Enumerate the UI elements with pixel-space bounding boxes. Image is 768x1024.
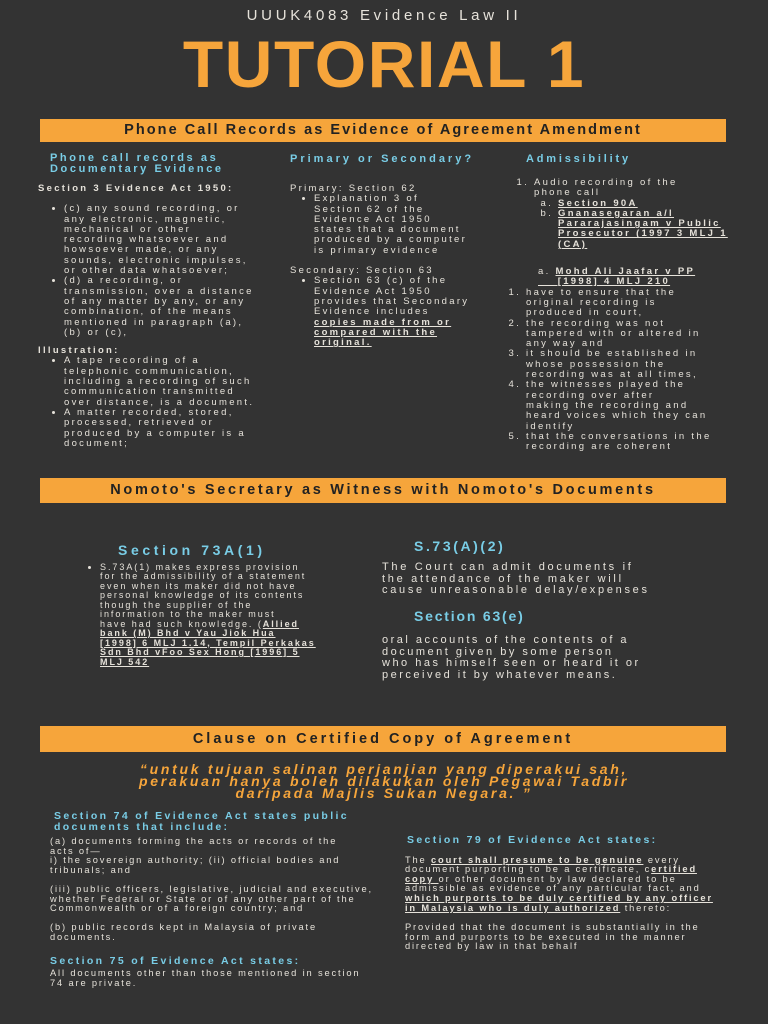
- panel: section 63(e): perceived it by whatever means.: [382, 669, 617, 681]
- panel: section 73A(1): though the supplier of the: [100, 600, 252, 610]
- panel: documentary evidence: telephonic communication,: [64, 366, 234, 377]
- panel: S.73(A)(2): cause unreasonable delay/expenses: [382, 584, 650, 596]
- panel: documentary evidence: Illustration:: [38, 345, 120, 356]
- quote: daripada Majlis Sukan Negara. ”: [236, 785, 532, 801]
- panel: admissibility: recording over after: [526, 390, 654, 401]
- panel: section 79: document purporting to be a certificate, certified: [405, 864, 697, 874]
- panel: admissibility: have to ensure that the: [526, 287, 676, 298]
- panel: admissibility: Pararajasingam v Public: [558, 218, 721, 229]
- banner: certified copy: [40, 726, 726, 752]
- banner: certified copy: Clause on Certified Copy of Agreement: [193, 731, 573, 747]
- panel: documentary evidence: mentioned in paragraph (a),: [64, 317, 243, 328]
- panel: documentary evidence: document;: [64, 438, 129, 449]
- title: TUTORIAL 1: [183, 27, 585, 101]
- panel: primary or secondary: is primary evidence: [314, 245, 440, 256]
- panel: S.73(A)(2): the attendance of the maker will: [382, 573, 624, 585]
- panel: documentary evidence: mechanical or other: [64, 224, 191, 235]
- panel: section 73A(1): [1998] 6 MLJ 1.14, Tempil Perkakas: [100, 638, 316, 648]
- panel: section 79: The court shall presume to be genuine every: [405, 855, 680, 865]
- panel: section 63(e): oral accounts of the contents of a: [382, 634, 629, 646]
- panel: admissibility: a. Mohd Ali Jaafar v PP: [538, 266, 695, 277]
- panel: primary or secondary: original.: [314, 337, 372, 348]
- panel: primary or secondary: Primary or Secondary?: [290, 153, 474, 165]
- panel: section 79: Section 79 of Evidence Act states:: [407, 834, 657, 846]
- panel: documentary evidence: (b) or (c),: [64, 327, 128, 338]
- panel: admissibility: recording was at all times,: [526, 369, 698, 380]
- panel: section 79: which purports to be duly certified by any officer: [405, 893, 713, 903]
- panel: documentary evidence: Documentary Evidence: [50, 163, 224, 175]
- panel: documentary evidence: Section 3 Evidence Act 1950:: [38, 183, 234, 194]
- panel: documentary evidence: A matter recorded, stored,: [64, 407, 234, 418]
- panel: admissibility: the recording was not: [526, 318, 665, 329]
- panel: admissibility: Prosecutor (1997 3 MLJ 1: [558, 228, 728, 239]
- panel: section 73A(1): MLJ 542: [100, 657, 149, 667]
- panel: documentary evidence: recording whatsoever and: [64, 234, 229, 245]
- panel: documentary evidence: combination, of the means: [64, 306, 233, 317]
- panel: documentary evidence: or other data whatsoever;: [64, 265, 229, 276]
- panel: section 63(e): who has himself seen or heard it or: [382, 657, 641, 669]
- panel: admissibility: Section 90A: [558, 198, 638, 209]
- panel: admissibility: original recording is: [526, 297, 657, 308]
- panel: section 73A(1): have had such knowledge. (Allied: [100, 619, 299, 629]
- panel: section 74 and 75: acts of—: [50, 846, 101, 856]
- panel: documentary evidence: (c) any sound recording, or: [64, 203, 240, 214]
- panel: section 79: in Malaysia who is duly authorized thereto:: [405, 903, 671, 913]
- panel: section 73A(1): Section 73A(1): [118, 542, 266, 558]
- panel: S.73(A)(2): The Court can admit documents if: [382, 561, 633, 573]
- quote: “untuk tujuan salinan perjanjian yang diperakui sah,: [140, 761, 628, 777]
- panel: section 74 and 75: (a) documents forming the acts or records of the: [50, 836, 337, 846]
- panel: primary or secondary: states that a document: [314, 224, 461, 235]
- panel: admissibility: making the recording and: [526, 400, 688, 411]
- panel: primary or secondary: [290, 153, 474, 348]
- panel: documentary evidence: transmission, over a distance: [64, 286, 254, 297]
- panel: section 74 and 75: tribunals; and: [50, 865, 132, 875]
- panel: section 63(e): [382, 608, 641, 681]
- panel: section 73A(1): even when its maker did not have: [100, 581, 296, 591]
- panel: primary or secondary: Secondary: Section 63: [290, 265, 434, 276]
- panel: admissibility: the witnesses played the: [526, 379, 685, 390]
- quote: perakuan hanya boleh dilakukan oleh Pegawai Tadbir: [139, 773, 629, 789]
- panel: section 73A(1): information to the maker must: [100, 609, 276, 619]
- subtitle: UUUK4083 Evidence Law II: [247, 7, 521, 24]
- panel: section 74 and 75: (iii) public officers, legislative, judicial and executive,: [50, 884, 373, 894]
- panel: section 73A(1): Sdn Bhd vFoo Sex Hong [1996] 5: [100, 647, 300, 657]
- panel: documentary evidence: of any matter by any, or any: [64, 296, 245, 307]
- panel: admissibility: that the conversations in the: [526, 431, 712, 442]
- panel: section 73A(1): S.73A(1) makes express provision: [100, 562, 299, 572]
- banner: Nomoto's secretary: [40, 478, 726, 503]
- panel: documentary evidence: any electronic, magnetic,: [64, 214, 227, 225]
- panel: section 73A(1): bank (M) Bhd v Yau Jiok Hua: [100, 628, 276, 638]
- panel: section 79: directed by law in that behalf: [405, 941, 578, 951]
- panel: section 63(e): document given by some person: [382, 646, 613, 658]
- panel: primary or secondary: Evidence includes: [314, 306, 430, 317]
- panel: S.73(A)(2): S.73(A)(2): [414, 538, 505, 554]
- panel: admissibility: Audio recording of the: [534, 177, 678, 188]
- panel: S.73(A)(2): [382, 538, 650, 596]
- banner: phone call records: [40, 119, 726, 142]
- panel: documentary evidence: communication transmitted: [64, 386, 235, 397]
- panel: primary or secondary: Section 62 of the: [314, 204, 424, 215]
- panel: section 74 and 75: Commonwealth or of a foreign country; and: [50, 903, 304, 913]
- banner: Nomoto's secretary: Nomoto's Secretary as Witness with Nomoto's Documents: [110, 482, 656, 498]
- panel: documentary evidence: sounds, electronic impulses,: [64, 255, 248, 266]
- panel: admissibility: [508, 153, 728, 452]
- panel: admissibility: heard voices which they can: [526, 410, 707, 421]
- quote: [138, 761, 629, 801]
- panel: admissibility: recording are coherent: [526, 441, 672, 452]
- panel: admissibility: [1998] 4 MLJ 210: [558, 276, 670, 287]
- panel: primary or secondary: copies made from or: [314, 317, 451, 328]
- panel: section 79: form and purports to be executed in the manner: [405, 932, 686, 942]
- panel: documentary evidence: including a recording of such: [64, 376, 252, 387]
- panel: section 74 and 75: documents that include:: [54, 820, 229, 832]
- panel: admissibility: whose possession the: [526, 359, 665, 370]
- panel: section 63(e): Section 63(e): [414, 608, 525, 624]
- panel: primary or secondary: Explanation 3 of: [314, 193, 419, 204]
- panel: section 73A(1): [88, 542, 316, 667]
- panel: admissibility: produced in court,: [526, 307, 643, 318]
- panel: primary or secondary: compared with the: [314, 327, 437, 338]
- panel: section 74 and 75: documents.: [50, 932, 117, 942]
- panel: documentary evidence: Phone call records as: [50, 152, 218, 164]
- panel: section 74 and 75: (b) public records kept in Malaysia of private: [50, 922, 317, 932]
- panel: section 74 and 75: Section 74 of Evidence Act states public: [54, 810, 349, 822]
- panel: section 74 and 75: Section 75 of Evidence Act states:: [50, 955, 300, 967]
- panel: documentary evidence: howsoever made, or any: [64, 244, 219, 255]
- panel: documentary evidence: over distance, is a document.: [64, 397, 254, 408]
- panel: admissibility: Gnanasegaran a/l: [558, 208, 674, 219]
- panel: documentary evidence: A tape recording of a: [64, 355, 200, 366]
- panel: section 73A(1): personal knowledge of its contents: [100, 590, 304, 600]
- panel: documentary evidence: (d) a recording, or: [64, 275, 183, 286]
- panel: primary or secondary: Evidence Act 1950: [314, 214, 432, 225]
- panel: primary or secondary: Evidence Act 1950: [314, 286, 432, 297]
- panel: section 74 and 75: whether Federal or State or of any other part of the: [50, 894, 356, 904]
- panel: admissibility: it should be established in: [526, 348, 697, 359]
- panel: documentary evidence: [38, 152, 254, 449]
- panel: section 74 and 75: 74 are private.: [50, 978, 137, 988]
- panel: admissibility: identify: [526, 421, 575, 432]
- panel: section 79: admissible as evidence of any particular fact, and: [405, 883, 701, 893]
- panel: admissibility: any way and: [526, 338, 605, 349]
- panel: section 74 and 75: All documents other than those mentioned in section: [50, 968, 360, 978]
- panel: admissibility: tampered with or altered in: [526, 328, 701, 339]
- panel: section 74 and 75: [50, 810, 373, 988]
- panel: section 79: Provided that the document is substantially in the: [405, 922, 700, 932]
- panel: section 73A(1): for the admissibility of a statement: [100, 571, 306, 581]
- panel: admissibility: phone call: [534, 187, 600, 198]
- banner: phone call records: Phone Call Records as Evidence of Agreement Amendment: [124, 122, 642, 138]
- panel: section 74 and 75: i) the sovereign authority; (ii) official bodies and: [50, 855, 340, 865]
- panel: documentary evidence: produced by a computer is a: [64, 428, 246, 439]
- panel: documentary evidence: processed, retrieved or: [64, 417, 214, 428]
- panel: admissibility: Admissibility: [526, 153, 631, 165]
- panel: primary or secondary: Section 63 (c) of the: [314, 275, 447, 286]
- panel: primary or secondary: produced by a computer: [314, 234, 467, 245]
- panel: section 79: copy or other document by law declared to be: [405, 874, 677, 884]
- panel: primary or secondary: provides that Secondary: [314, 296, 469, 307]
- panel: primary or secondary: Primary: Section 62: [290, 183, 417, 194]
- panel: section 79: [405, 834, 713, 951]
- panel: admissibility: (CA): [558, 239, 587, 250]
